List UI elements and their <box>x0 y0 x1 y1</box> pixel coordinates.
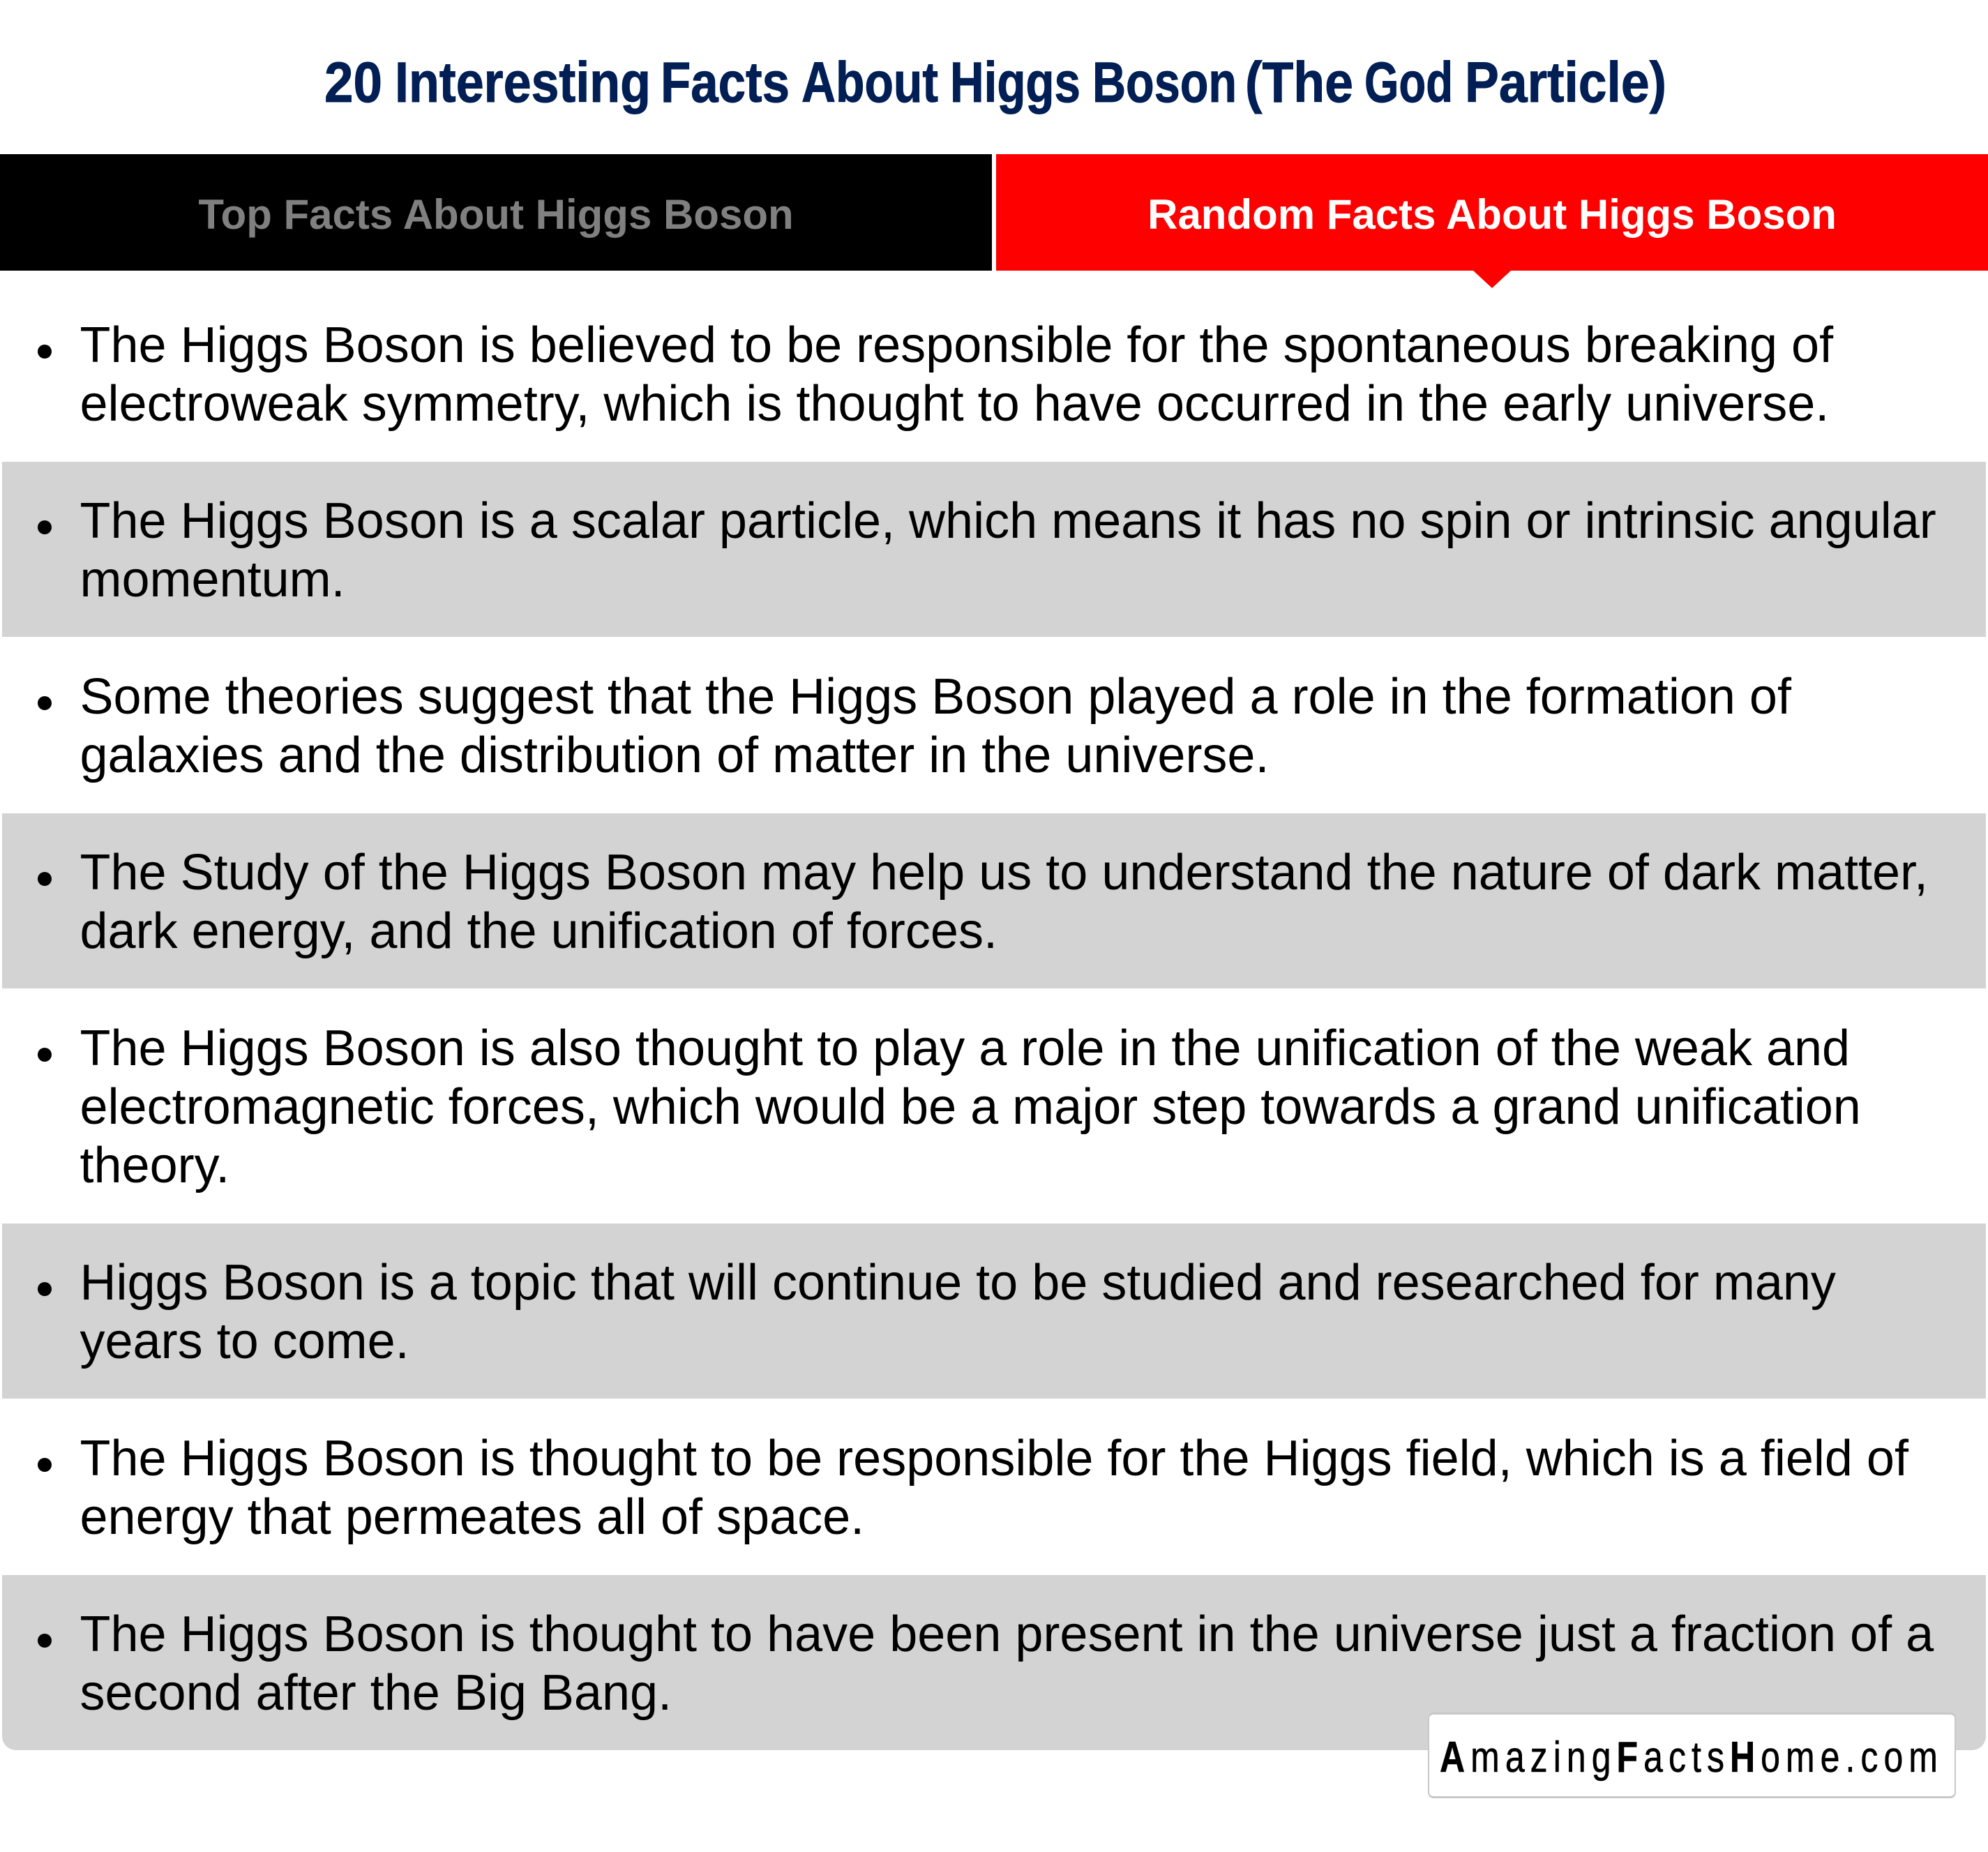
bullet 8 <box>38 1634 52 1648</box>
title: (The <box>1245 51 1353 114</box>
fact text 1: electroweak symmetry, which is thought to have occurred in the early universe. <box>80 376 1829 432</box>
fact text 3 <box>80 669 1791 783</box>
fact text 8 <box>80 1606 1934 1721</box>
title: 20 <box>324 51 382 114</box>
fact text 4 <box>80 845 1928 959</box>
fact text 2: momentum. <box>80 552 345 608</box>
fact text 5: theory. <box>80 1138 229 1194</box>
fact text 3: Some theories suggest that the Higgs Boson played a role in the formation of <box>80 669 1791 725</box>
bullet 6 <box>38 1282 52 1296</box>
title: About <box>801 51 938 114</box>
fact text 4: The Study of the Higgs Boson may help us to understand the nature of dark matter, <box>80 845 1928 901</box>
title: Facts <box>661 51 790 114</box>
fact text 7: energy that permeates all of space. <box>80 1489 864 1545</box>
fact text 1: The Higgs Boson is believed to be responsible for the spontaneous breaking of <box>80 317 1833 373</box>
fact text 7: The Higgs Boson is thought to be responsible for the Higgs field, which is a field of <box>80 1431 1908 1486</box>
title <box>324 51 1666 114</box>
fact text 8: The Higgs Boson is thought to have been present in the universe just a fraction of a <box>80 1606 1934 1662</box>
title: Interesting <box>395 51 651 114</box>
watermark logo <box>1428 1712 1956 1798</box>
title: Boson <box>1092 51 1237 114</box>
fact text 6: Higgs Boson is a topic that will continue to be studied and researched for many <box>80 1255 1836 1311</box>
icon: active tab pointer <box>1473 271 1511 288</box>
tab: random facts (active): Random Facts About Higgs Boson <box>1147 191 1837 238</box>
title: Higgs <box>950 51 1080 114</box>
fact text 6: years to come. <box>80 1313 409 1369</box>
bullet 2 <box>38 520 52 534</box>
bullet 7 <box>38 1458 52 1472</box>
fact text 3: galaxies and the distribution of matter in the universe. <box>80 728 1269 783</box>
fact text 5: The Higgs Boson is also thought to play a role in the unification of the weak and <box>80 1021 1850 1076</box>
fact text 8: second after the Big Bang. <box>80 1665 672 1721</box>
fact row 2 <box>2 462 1986 637</box>
fact text 7 <box>80 1431 1908 1545</box>
fact text 5 <box>80 1021 1861 1194</box>
fact row 8 <box>2 1575 1986 1750</box>
fact row 3 <box>38 669 1791 783</box>
bullet 1 <box>38 345 52 359</box>
fact text 2: The Higgs Boson is a scalar particle, which means it has no spin or intrinsic angular <box>80 493 1936 549</box>
bullet 5 <box>38 1048 52 1062</box>
bullet 4 <box>38 872 52 886</box>
fact row 1 <box>38 317 1833 432</box>
watermark text: AmazingFactsHome.com <box>1440 1733 1943 1782</box>
fact row 7 <box>38 1431 1908 1545</box>
title: God <box>1364 51 1453 114</box>
fact row 5 <box>38 1021 1861 1194</box>
fact text 6 <box>80 1255 1836 1369</box>
fact text 1 <box>80 317 1833 432</box>
title: Particle) <box>1465 51 1666 114</box>
tab: top facts <box>0 154 992 271</box>
tab: top facts: Top Facts About Higgs Boson <box>198 191 794 238</box>
bullet 3 <box>38 696 52 710</box>
fact row 6 <box>2 1224 1986 1399</box>
fact text 4: dark energy, and the unification of forces. <box>80 903 997 959</box>
fact row 4 <box>2 813 1986 988</box>
fact text 5: electromagnetic forces, which would be a major step towards a grand unification <box>80 1079 1861 1135</box>
tab: random facts (active) <box>996 154 1988 271</box>
fact text 2 <box>80 493 1936 608</box>
